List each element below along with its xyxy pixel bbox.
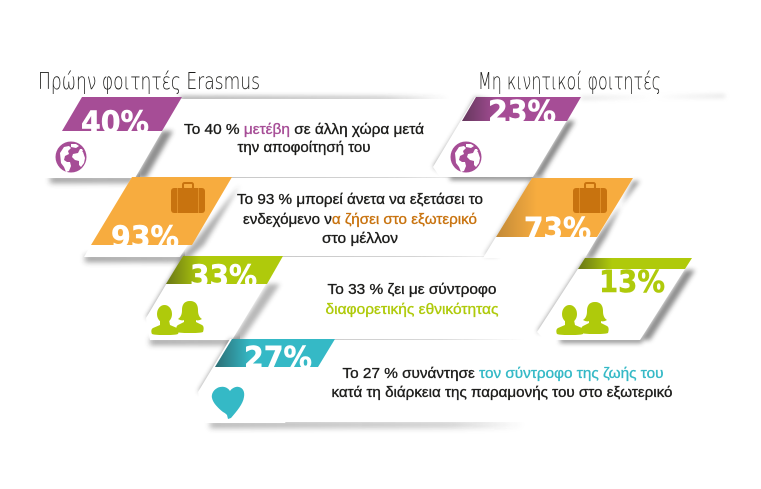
text block (332, 366, 672, 401)
icon: suitcase (573, 183, 607, 213)
text block (326, 282, 498, 318)
panel: non-mobile 23% (433, 95, 725, 180)
color band (215, 339, 335, 367)
panel: non-mobile 13% (537, 258, 695, 343)
icon: suitcase (171, 183, 205, 213)
panel: Erasmus 93% (84, 177, 525, 262)
percentage: 93% (111, 220, 179, 256)
heading: former Erasmus students: Πρώην φοιτητές Erasmus (38, 69, 260, 95)
panel: Erasmus 33% (146, 256, 525, 345)
color band (166, 256, 283, 284)
text block (237, 192, 483, 247)
panel: Erasmus 40% (36, 96, 500, 183)
percentage: 40% (81, 106, 149, 140)
text block: Το 40 % μετέβη σε άλλη χώρα μετά (184, 122, 424, 138)
icon: globe (450, 142, 482, 172)
percentage: 73% (524, 212, 591, 247)
percentage: 23% (488, 95, 556, 130)
color band (462, 97, 581, 121)
heading: non-mobile students: Μη κινητικοί φοιτητές (478, 69, 661, 95)
text block: Το 27 % συνάντησε τον σύντροφο της ζωής του (342, 366, 664, 382)
text block: Το 93 % μπορεί άνετα να εξετάσει το (237, 192, 483, 208)
text block: ενδεχόμενο ν α ζήσει στο εξωτερικό (243, 212, 477, 228)
percentage: 33% (190, 260, 257, 294)
color band (496, 178, 633, 237)
color band (91, 177, 232, 245)
text block: κατά τη διάρκεια της παραμονής του στο εξωτερικό (332, 385, 672, 401)
color band (62, 97, 182, 131)
percentage: 13% (599, 265, 665, 300)
icon: heart (212, 387, 244, 419)
icon: globe (56, 142, 86, 172)
panel: Erasmus 27% (198, 339, 672, 428)
text block: την αποφοίτησή του (238, 140, 371, 156)
icon: two people (556, 302, 609, 335)
icon: two people (151, 301, 204, 335)
text block: στο μέλλον (322, 231, 398, 247)
color band (578, 258, 692, 269)
percentage: 27% (244, 341, 312, 376)
text block (184, 122, 424, 156)
text block: Το 33 % ζει με σύντροφο (328, 282, 496, 298)
panel: non-mobile 73% (483, 178, 640, 258)
text block: διαφορετικής εθνικότητας (326, 302, 498, 318)
